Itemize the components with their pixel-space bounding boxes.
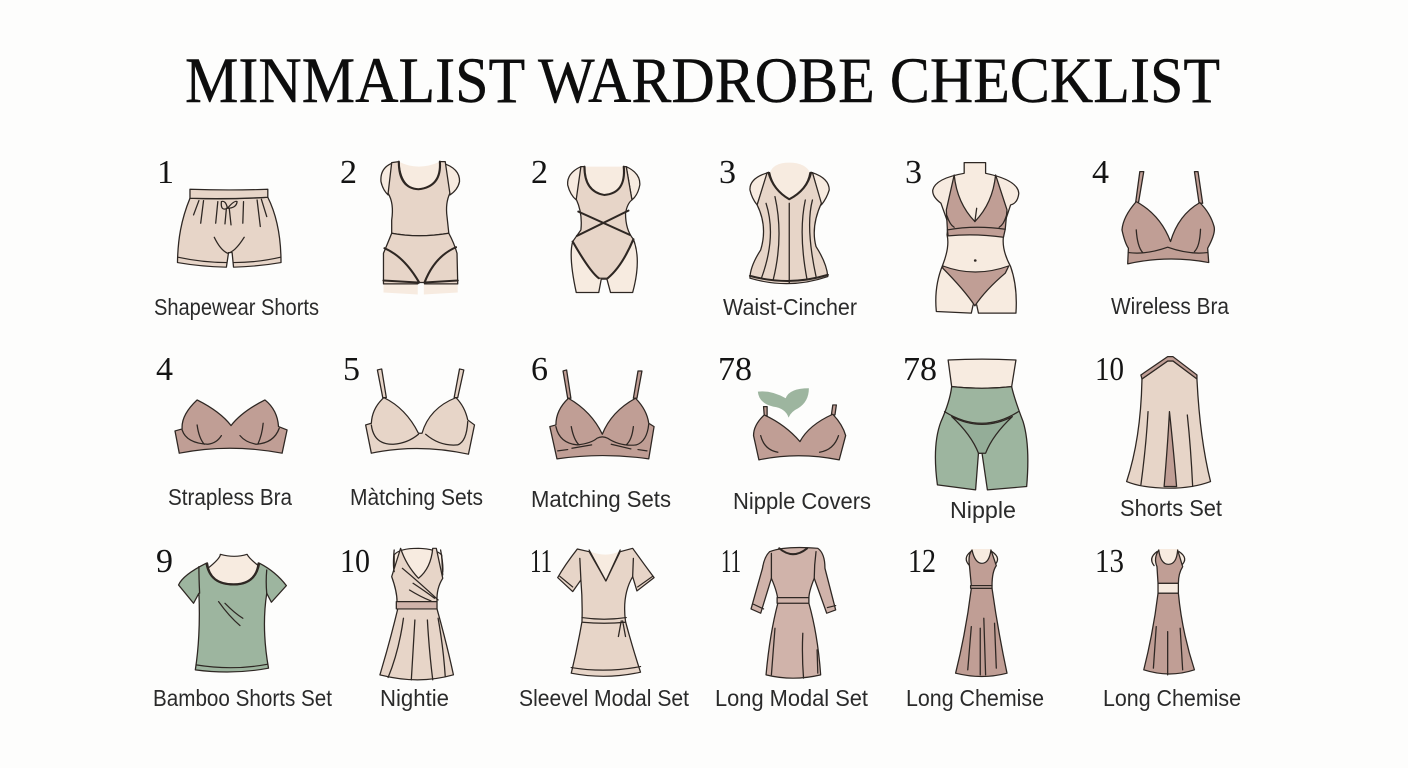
item: Nipple Covers <box>718 351 871 514</box>
item: Nightie <box>340 543 453 711</box>
number 4: 4 <box>1092 154 1109 191</box>
number 78: 78 <box>903 351 937 388</box>
number 10: 10 <box>1095 351 1124 388</box>
label: Strapless Bra <box>168 484 292 510</box>
item: Strapless Bra <box>156 351 292 510</box>
item: Sleevel Modal Set <box>519 543 690 711</box>
item: Long Chemise with waistband <box>906 543 1044 711</box>
icon: long-sleeve dress <box>751 548 836 678</box>
label: Nipple Covers <box>733 488 871 514</box>
label: Shorts Set <box>1120 495 1223 521</box>
item: Shapewear Shorts <box>154 154 319 320</box>
number 78: 78 <box>718 351 752 388</box>
label: Nightie <box>380 685 449 711</box>
item: Shorts Set <box>1095 351 1223 521</box>
icon: bra with green leaf covers <box>754 388 846 460</box>
number 2: 2 <box>340 154 357 191</box>
label: Long Chemise <box>906 685 1044 711</box>
item: Long Modal Set <box>715 543 869 711</box>
number 1: 1 <box>157 154 174 191</box>
label: Màtching Sets <box>350 484 483 510</box>
icon: tank bodysuit <box>381 162 460 295</box>
number 10: 10 <box>340 543 370 580</box>
number 2: 2 <box>531 154 548 191</box>
label: Matching Sets <box>531 486 671 512</box>
item: bra and briefs on torso <box>905 154 1019 313</box>
icon: torso bra and briefs <box>933 163 1019 313</box>
label: Wireless Bra <box>1111 293 1229 319</box>
icon: green high-waist shorts <box>935 359 1028 490</box>
item: tank bodysuit <box>340 154 460 295</box>
icon: halter slip <box>1127 357 1211 488</box>
icon: green t-shirt <box>179 554 286 672</box>
item: Bamboo Shorts Set <box>153 543 333 711</box>
icon: long chemise <box>956 549 1007 677</box>
number 12: 12 <box>908 543 936 580</box>
label: Long Chemise <box>1103 685 1241 711</box>
icon: nightie dress <box>380 548 453 680</box>
icon: v-neck tee dress <box>558 548 654 676</box>
item: Long Chemise two-piece <box>1095 543 1241 711</box>
item: cross bodysuit <box>531 154 640 293</box>
label: Nipple <box>950 497 1016 523</box>
number 5: 5 <box>343 351 360 388</box>
number 9: 9 <box>156 543 173 580</box>
icon: cross-strap bodysuit <box>568 167 640 293</box>
number 4: 4 <box>156 351 173 388</box>
label: Sleevel Modal Set <box>519 685 690 711</box>
number 3: 3 <box>719 154 736 191</box>
item: Wireless Bra <box>1092 154 1229 319</box>
label: Long Modal Set <box>715 685 869 711</box>
label: Bamboo Shorts Set <box>153 685 333 711</box>
icon: beige bra <box>366 369 475 454</box>
icon: mauve bra <box>550 370 654 459</box>
number 11: 11 <box>721 543 741 580</box>
item: Nipple <box>903 351 1028 523</box>
icon: wireless bra <box>1122 172 1214 264</box>
number 6: 6 <box>531 351 548 388</box>
icon: shapewear shorts <box>177 189 281 267</box>
icon: waist cincher <box>750 163 829 284</box>
item: Matching Sets mauve <box>531 351 671 512</box>
label: Shapewear Shorts <box>154 294 319 320</box>
item: Matching Sets beige <box>343 351 483 510</box>
number 3: 3 <box>905 154 922 191</box>
icon: two-piece long chemise <box>1144 549 1194 675</box>
number 13: 13 <box>1095 543 1124 580</box>
item: Waist-Cincher <box>719 154 857 320</box>
number 11: 11 <box>530 543 552 580</box>
icon: strapless bra <box>175 400 287 453</box>
title: MINMALIST WARDROBE CHECKLIST <box>185 45 1220 117</box>
label: Waist-Cincher <box>723 294 857 320</box>
